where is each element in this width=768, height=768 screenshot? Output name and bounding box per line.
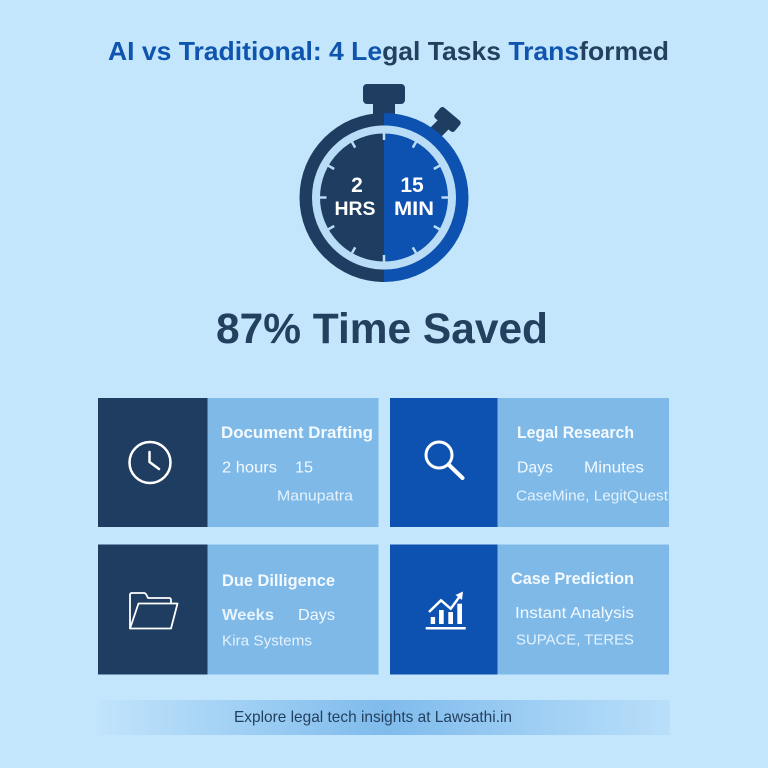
icon: clock bbox=[130, 442, 170, 483]
panel: case prediction bbox=[390, 544, 669, 674]
time result: Instant Analysis bbox=[515, 605, 634, 622]
time comparison: Weeks bbox=[222, 607, 274, 624]
heading: case prediction: Case Prediction bbox=[511, 569, 634, 588]
heading: document drafting: Document Drafting bbox=[221, 423, 373, 442]
heading: due diligence: Due Dilligence bbox=[222, 571, 335, 590]
icon: folder bbox=[130, 593, 178, 628]
stopwatch left label: 2 bbox=[351, 174, 363, 197]
tool name: Manupatra bbox=[277, 488, 354, 504]
icon: magnifier bbox=[426, 442, 462, 478]
time comparison bbox=[222, 460, 313, 476]
heading: legal research: Legal Research bbox=[517, 423, 634, 442]
headline: 87% Time Saved bbox=[216, 305, 548, 353]
time comparison: Days bbox=[298, 607, 335, 624]
time comparison: 15 bbox=[295, 460, 313, 476]
panel: document drafting bbox=[98, 398, 378, 527]
stopwatch dark half bbox=[300, 113, 384, 282]
stopwatch crown bbox=[363, 84, 405, 120]
stopwatch side button bbox=[430, 106, 462, 138]
stopwatch bbox=[300, 84, 468, 282]
icon: growth chart bbox=[426, 592, 466, 630]
stopwatch blue half bbox=[384, 113, 468, 282]
tool names: SUPACE, TERES bbox=[516, 632, 634, 648]
panel: due diligence bbox=[98, 544, 378, 674]
panel: legal research bbox=[390, 398, 669, 527]
time comparison bbox=[222, 607, 335, 624]
stopwatch left label: HRS bbox=[334, 199, 376, 220]
stopwatch left label bbox=[334, 174, 376, 220]
stopwatch right label: 15 bbox=[400, 174, 424, 197]
stopwatch inner ring bbox=[316, 130, 452, 266]
time comparison: Days bbox=[517, 460, 553, 476]
time comparison: 2 hours bbox=[222, 460, 277, 476]
stopwatch right label bbox=[394, 174, 434, 220]
tool name: Kira Systems bbox=[222, 632, 312, 650]
footer band bbox=[98, 700, 670, 735]
stopwatch right label: MIN bbox=[394, 199, 434, 220]
tool names: CaseMine, LegitQuest bbox=[516, 488, 669, 504]
footer text: Explore legal tech insights at Lawsathi.in bbox=[234, 709, 512, 726]
title: AI vs Traditional: 4 Legal Tasks Transformed bbox=[108, 36, 669, 66]
time comparison bbox=[517, 460, 644, 476]
stopwatch ticks bbox=[320, 133, 448, 262]
time comparison: Minutes bbox=[584, 460, 644, 476]
